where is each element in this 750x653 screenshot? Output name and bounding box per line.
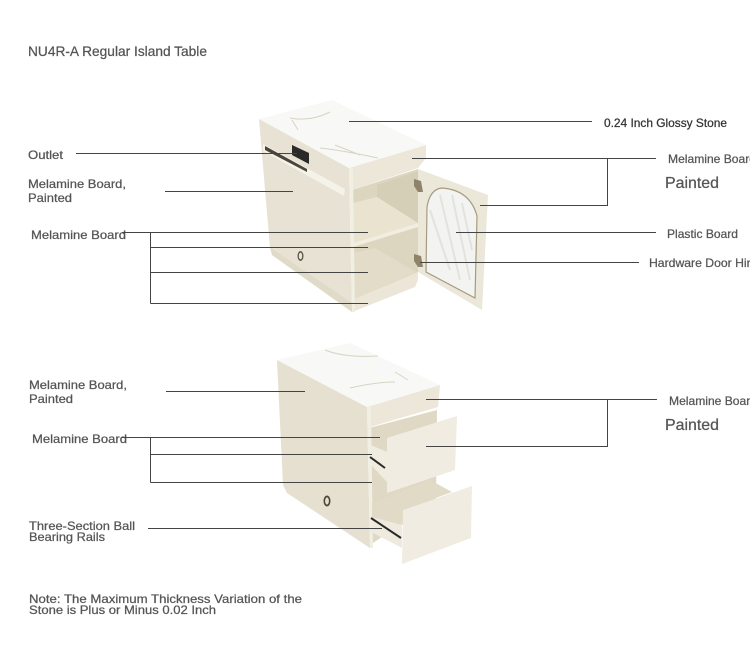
label: ball bearing rails: Three-Section Ball bbox=[29, 519, 135, 533]
label: melamine board painted, right lower bbox=[426, 394, 750, 446]
label: plastic board: Plastic Board bbox=[667, 227, 738, 241]
label: melamine board painted, lower bbox=[29, 378, 305, 406]
label: glossy stone: 0.24 Inch Glossy Stone bbox=[604, 116, 727, 130]
label: melamine board painted, upper bbox=[28, 177, 293, 205]
label: melamine board painted, right lower: Painted bbox=[665, 417, 719, 434]
label: melamine board painted, upper: Melamine Board, bbox=[28, 177, 126, 191]
title: NU4R-A Regular Island Table bbox=[28, 43, 207, 59]
label: melamine board shelves bbox=[31, 228, 368, 304]
note: Stone is Plus or Minus 0.02 Inch bbox=[29, 603, 216, 617]
product image: cabinet with drawers bbox=[277, 343, 472, 564]
note: Note: The Maximum Thickness Variation of the bbox=[29, 592, 302, 606]
label: ball bearing rails: Bearing Rails bbox=[29, 530, 105, 544]
label: melamine board painted, lower: Melamine Board, bbox=[29, 378, 127, 392]
label: melamine board shelves: Melamine Board bbox=[31, 228, 126, 242]
product image: cabinet with door bbox=[259, 100, 488, 312]
label: melamine board painted, right upper: Painted bbox=[665, 175, 719, 192]
label: ball bearing rails bbox=[29, 519, 382, 544]
label: outlet: Outlet bbox=[28, 148, 64, 162]
label: melamine board painted, right upper bbox=[412, 152, 750, 206]
label: melamine board painted, upper: Painted bbox=[28, 191, 72, 205]
label: melamine board painted, lower: Painted bbox=[29, 392, 73, 406]
label: melamine board drawers: Melamine Board bbox=[32, 432, 127, 446]
note bbox=[29, 592, 302, 617]
label: melamine board drawers bbox=[32, 432, 380, 482]
